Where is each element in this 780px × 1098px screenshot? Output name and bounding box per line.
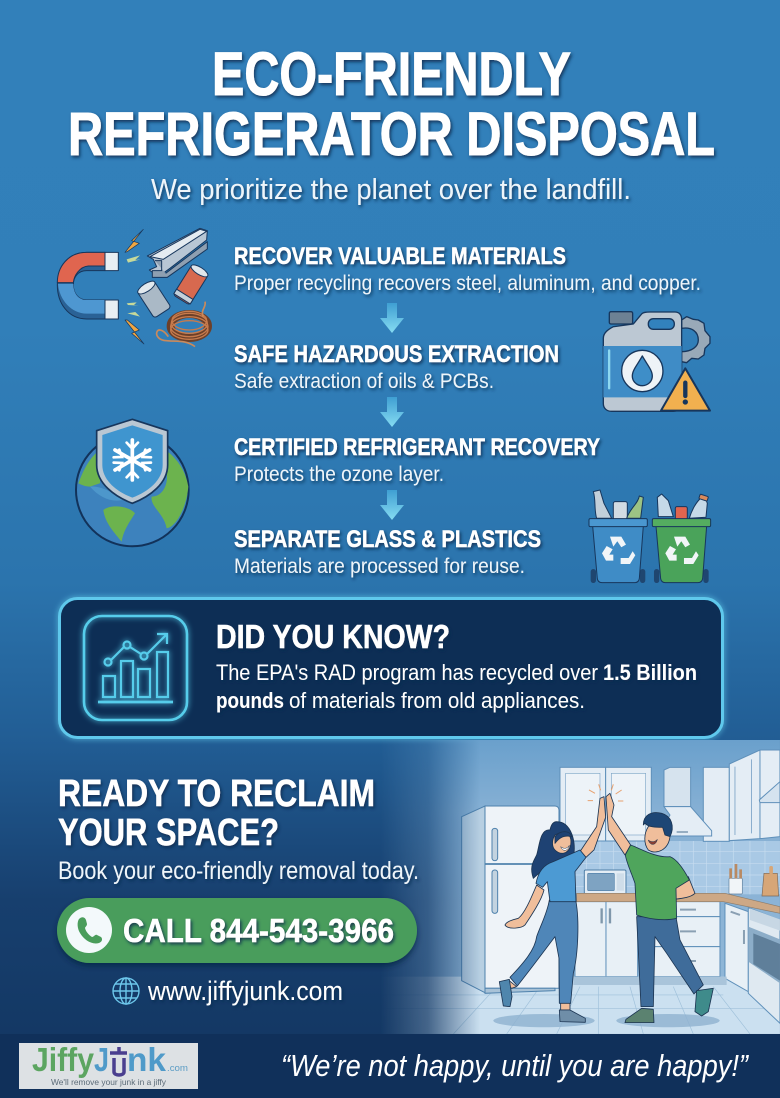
logo bin mark	[110, 1047, 127, 1075]
title: ECO-FRIENDLY	[212, 40, 571, 108]
icon: magnet and metals	[57, 228, 210, 347]
logo: Jiffy	[32, 1041, 95, 1078]
callout text: 1.5 Billion	[603, 660, 697, 685]
floor	[380, 977, 780, 1034]
callout text: pounds	[216, 688, 284, 713]
callout text: The EPA's RAD program has recycled over	[216, 660, 598, 685]
icon: glowing growth chart	[84, 616, 187, 720]
step 4: separate glass and plastics: Materials are processed for reuse.	[234, 555, 525, 578]
range hood	[662, 767, 712, 836]
lower cabinets	[573, 902, 748, 992]
callout text	[216, 660, 697, 713]
wall	[380, 740, 780, 977]
phone number: CALL 844-543-3966	[123, 912, 394, 949]
utensils and cutting board	[729, 864, 779, 896]
logo: .com	[167, 1063, 188, 1073]
footer bar	[0, 1034, 780, 1098]
subtitle: We prioritize the planet over the landfill.	[151, 174, 631, 206]
call to action text: Book your eco-friendly removal today.	[58, 857, 419, 885]
call button	[57, 898, 417, 963]
step 2: safe hazardous extraction	[234, 341, 559, 393]
sparkle marks	[588, 784, 623, 801]
floor shadows	[493, 1014, 720, 1027]
backsplash	[573, 841, 780, 894]
title	[68, 40, 715, 168]
icon: recycling bins	[589, 490, 711, 583]
step 3: certified refrigerant recovery: Protects the ozone layer.	[234, 463, 444, 486]
heading: ready to reclaim: YOUR SPACE?	[58, 812, 279, 854]
logo: J	[94, 1041, 109, 1078]
step 1: recover valuable materials: Proper recycling recovers steel, aluminum, and copper.	[234, 272, 701, 295]
callout heading: DID YOU KNOW?	[216, 618, 450, 655]
step 2: safe hazardous extraction: Safe extraction of oils & PCBs.	[234, 370, 494, 393]
illustration: couple high-fiving in kitchen	[380, 740, 780, 1034]
heading: ready to reclaim: READY TO RECLAIM	[58, 773, 375, 815]
panel: did you know	[60, 598, 722, 738]
upper cabinets	[560, 750, 780, 841]
icon: globe	[113, 978, 139, 1004]
arrow 1	[380, 303, 404, 333]
man	[606, 793, 713, 1023]
icon: oil jug with gear and warning	[603, 312, 710, 411]
icon: globe with snowflake shield	[76, 419, 189, 546]
microwave	[584, 870, 626, 894]
logo	[19, 1041, 198, 1089]
callout text: of materials from old appliances.	[289, 688, 585, 713]
step 1: recover valuable materials: RECOVER VALUABLE MATERIALS	[234, 243, 566, 270]
step 1: recover valuable materials	[234, 243, 701, 295]
logo: nk	[127, 1041, 167, 1078]
step 3: certified refrigerant recovery: CERTIFIED REFRIGERANT RECOVERY	[234, 434, 600, 461]
step 4: separate glass and plastics	[234, 526, 541, 578]
website url: www.jiffyjunk.com	[147, 976, 343, 1006]
countertop	[577, 893, 780, 913]
woman	[499, 797, 606, 1022]
step 4: separate glass and plastics: SEPARATE GLASS & PLASTICS	[234, 526, 541, 553]
arrow 2	[380, 397, 404, 427]
logo: We'll remove your junk in a jiffy	[51, 1077, 167, 1087]
oven	[748, 908, 780, 1023]
icon: phone	[66, 907, 112, 953]
step 3: certified refrigerant recovery	[234, 434, 600, 486]
website	[113, 976, 343, 1006]
refrigerator	[462, 806, 559, 993]
arrow 3	[380, 490, 404, 520]
step 2: safe hazardous extraction: SAFE HAZARDOUS EXTRACTION	[234, 341, 559, 368]
heading: ready to reclaim	[58, 773, 375, 854]
